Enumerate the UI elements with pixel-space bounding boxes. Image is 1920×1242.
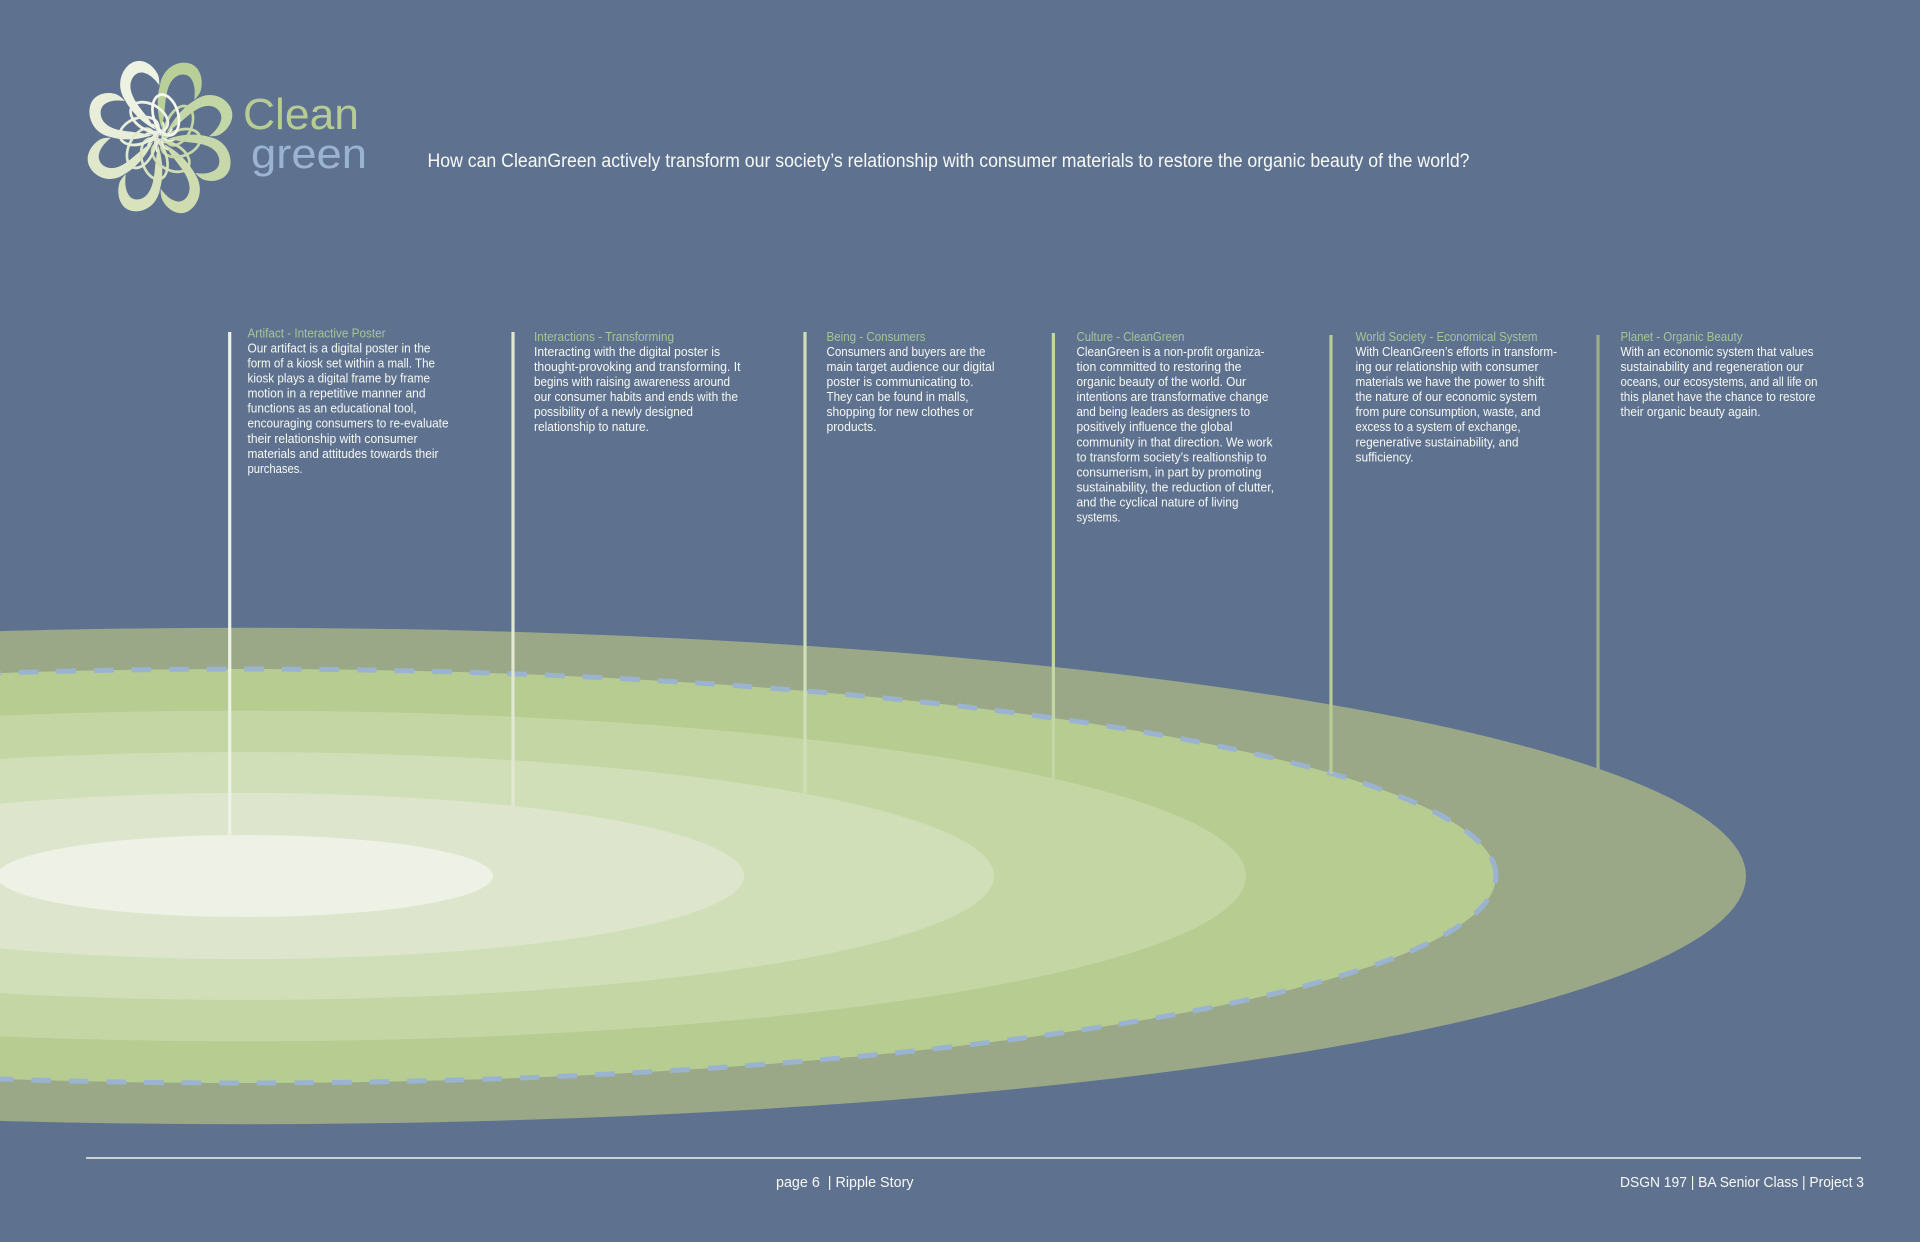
line: interactions xyxy=(511,332,515,806)
text block: Planet: oceans, our ecosystems, and all life on xyxy=(1620,374,1818,389)
text block: World Society: excess to a system of exchange, xyxy=(1356,419,1520,434)
leader lines xyxy=(230,332,1598,835)
text block: Artifact: form of a kiosk set within a mall. The xyxy=(248,356,435,370)
text block: Culture: systems. xyxy=(1076,510,1120,524)
text block: Interactions: relationship to nature. xyxy=(534,419,649,434)
text block: Artifact: motion in a repetitive manner and xyxy=(248,386,426,401)
text block: Planet: With an economic system that values xyxy=(1620,344,1814,359)
text block: Culture: CleanGreen is a non-profit organiza- xyxy=(1076,344,1264,359)
text block: Artifact xyxy=(248,326,448,476)
ring: being xyxy=(0,752,994,1000)
title question: How can CleanGreen actively transform our society’s relationship with consumer materials to restore the organic beauty of the world? xyxy=(428,151,1470,172)
text block: Being xyxy=(826,329,995,434)
text block: Interactions: our consumer habits and ends with the xyxy=(534,389,738,404)
ring: planet xyxy=(0,628,1746,1124)
text block: World Society: With CleanGreen’s efforts in transform- xyxy=(1356,344,1557,359)
text block: Culture: intentions are transformative change xyxy=(1076,389,1268,404)
text block: Culture: Culture - CleanGreen xyxy=(1076,329,1184,344)
text block: Culture xyxy=(1076,329,1274,524)
text block: Being: Consumers and buyers are the xyxy=(826,344,986,359)
text block: Being: They can be found in malls, xyxy=(826,389,968,404)
text block: Interactions: Interactions - Transforming xyxy=(534,329,674,344)
text block: Planet: this planet have the chance to restore xyxy=(1620,389,1816,404)
text block: Artifact: Artifact - Interactive Poster xyxy=(248,326,386,340)
text block: Being: Being - Consumers xyxy=(826,329,926,344)
text block: Planet xyxy=(1620,329,1818,419)
text block: Interactions: possibility of a newly designed xyxy=(534,404,693,419)
text block: World Society: materials we have the power to shift xyxy=(1356,374,1545,389)
text block: Culture: and being leaders as designers to xyxy=(1076,404,1250,419)
text block: Artifact: functions as an educational tool, xyxy=(248,401,416,416)
text block: Culture: positively influence the global xyxy=(1076,419,1233,434)
text block: Artifact: purchases. xyxy=(248,461,302,476)
text block: Artifact: encouraging consumers to re-evaluate xyxy=(248,416,448,431)
ring: world society (dashed boundary) xyxy=(0,669,1496,1083)
text block: Culture: community in that direction. We work xyxy=(1076,434,1273,449)
text block: Planet: Planet - Organic Beauty xyxy=(1620,329,1743,344)
text block: World Society: ing our relationship with consumer xyxy=(1356,359,1539,374)
text block: Culture: sustainability, the reduction of clutter, xyxy=(1076,479,1274,494)
ring: interactions xyxy=(0,793,744,959)
text block: Culture: consumerism, in part by promoting xyxy=(1076,464,1262,479)
text block: Culture: tion committed to restoring the xyxy=(1076,359,1242,374)
ring: artifact xyxy=(0,835,493,917)
footer: page label: page 6 | Ripple Story xyxy=(776,1174,914,1191)
footer xyxy=(86,1158,1864,1191)
text block: Being: shopping for new clothes or xyxy=(826,404,974,419)
footer: course label: DSGN 197 | BA Senior Class | Project 3 xyxy=(1620,1174,1864,1191)
wordmark: Clean: Clean xyxy=(243,90,359,139)
text block: World Society: sufficiency. xyxy=(1356,449,1414,464)
text block: Planet: their organic beauty again. xyxy=(1620,404,1760,419)
dashed boundary ellipse xyxy=(0,669,1496,1083)
text block: Interactions: Interacting with the digital poster is xyxy=(534,344,720,359)
wordmark: green: green xyxy=(251,130,367,177)
text block: World Society: from pure consumption, waste, and xyxy=(1356,404,1540,419)
text block: Being: main target audience our digital xyxy=(826,359,995,374)
text block: World Society xyxy=(1356,329,1557,464)
line: being xyxy=(803,332,807,793)
line: planet xyxy=(1596,335,1600,769)
text block: Being: products. xyxy=(826,419,876,434)
text block: Culture: and the cyclical nature of living xyxy=(1076,494,1238,510)
ripple diagram: concentric ellipses xyxy=(0,628,1746,1124)
text block: Interactions: thought-provoking and transforming. It xyxy=(534,359,741,374)
text block: Artifact: materials and attitudes towards their xyxy=(248,446,439,461)
text block: World Society: the nature of our economic system xyxy=(1356,389,1537,404)
text block: Artifact: their relationship with consumer xyxy=(248,431,418,446)
text block: Being: poster is communicating to. xyxy=(826,374,974,389)
line: world society xyxy=(1329,335,1333,774)
text block: World Society: World Society - Economical System xyxy=(1356,329,1538,344)
text block: Culture: to transform society’s realtionship to xyxy=(1076,449,1266,464)
line: artifact xyxy=(228,332,231,835)
text block: World Society: regenerative sustainability, and xyxy=(1356,434,1518,449)
ring: culture xyxy=(0,711,1246,1041)
line: culture xyxy=(1052,333,1055,778)
text block: Planet: sustainability and regeneration our xyxy=(1620,359,1804,374)
logo: CleanGreen flower and wordmark xyxy=(81,53,367,221)
icon: flower logo xyxy=(81,53,239,221)
text block: Interactions xyxy=(534,329,741,434)
text block: Artifact: kiosk plays a digital frame by frame xyxy=(248,371,430,386)
text block: Culture: organic beauty of the world. Our xyxy=(1076,374,1247,389)
text block: Interactions: begins with raising awareness around xyxy=(534,374,730,389)
text block: Artifact: Our artifact is a digital poster in the xyxy=(248,340,430,356)
